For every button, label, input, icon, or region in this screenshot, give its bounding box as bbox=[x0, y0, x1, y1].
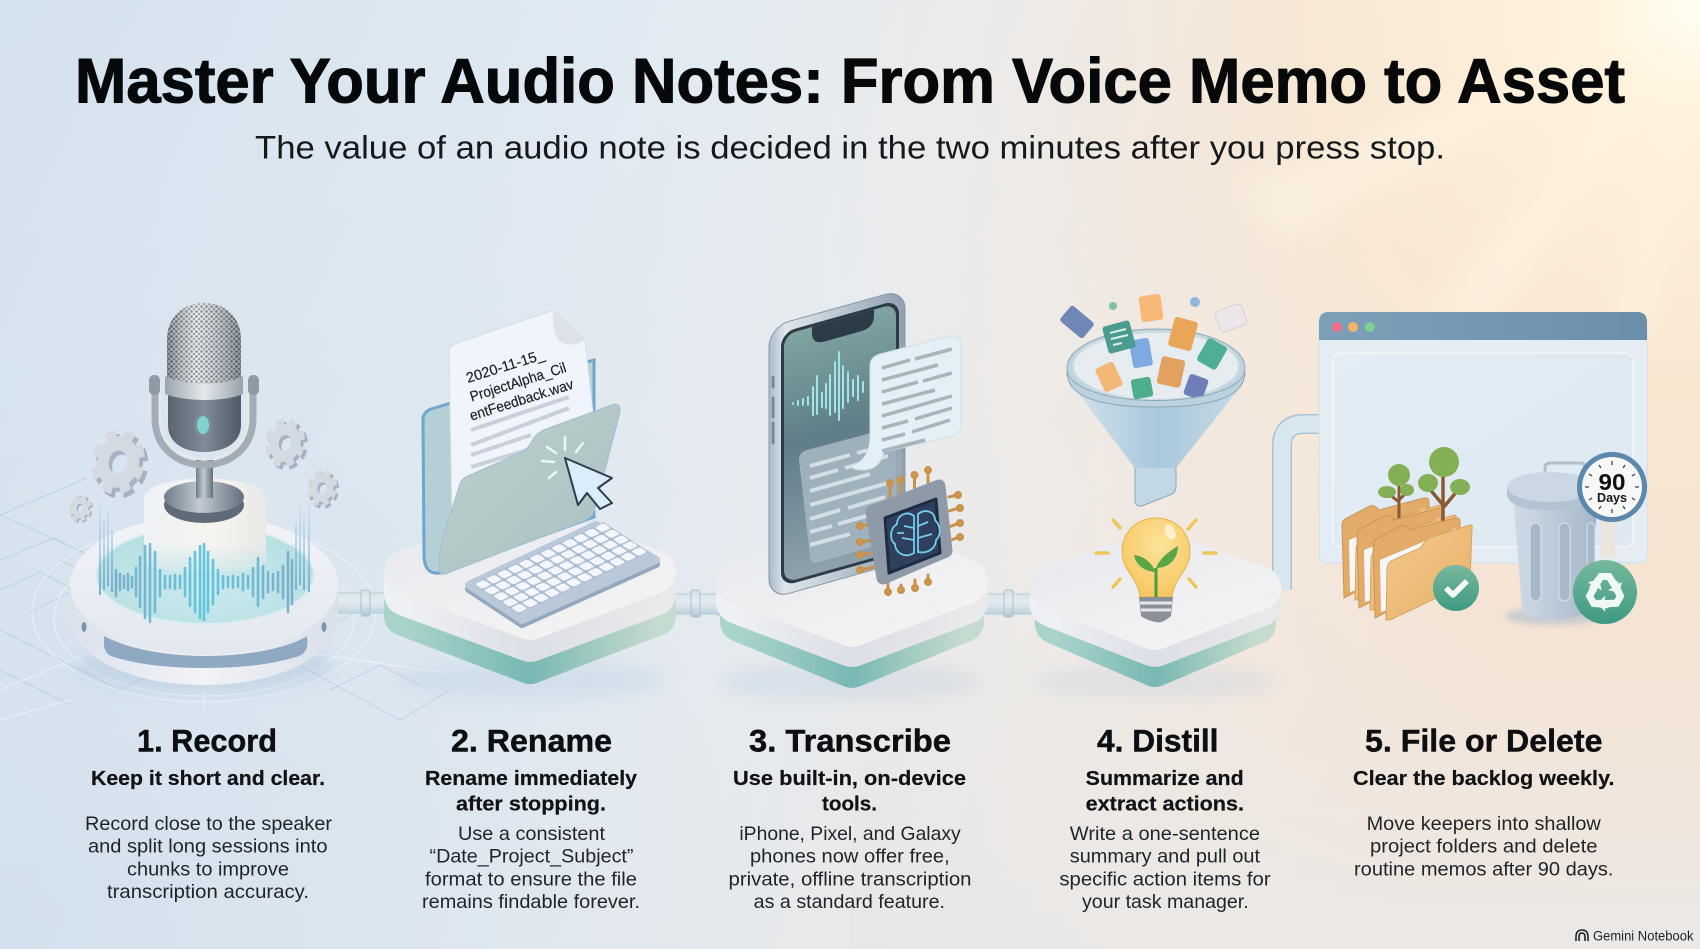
icon: funnel bbox=[1067, 329, 1245, 506]
text block: step 4: 4. Distill bbox=[1097, 723, 1218, 759]
text block: step 3: as a standard feature. bbox=[754, 891, 945, 913]
title: Master Your Audio Notes: From Voice Memo to Asset bbox=[75, 47, 1625, 117]
icon: AI chip with brain bbox=[858, 468, 962, 594]
panel: step 4 distill illustration bbox=[1035, 294, 1275, 698]
icon: transcript card bbox=[799, 428, 902, 563]
text block: step 2: format to ensure the file bbox=[425, 868, 637, 890]
text block: step 1: transcription accuracy. bbox=[107, 881, 309, 903]
panel: step 3 transcribe illustration bbox=[722, 289, 982, 700]
text block: step 2: “Date_Project_Subject” bbox=[430, 846, 634, 868]
icon: check badge bbox=[1433, 565, 1479, 611]
text block: step 4: Summarize and bbox=[1086, 767, 1244, 790]
text block: step 5: Clear the backlog weekly. bbox=[1353, 767, 1614, 790]
icon: browser window bbox=[1319, 312, 1647, 563]
platform 3 bbox=[722, 530, 982, 700]
text block: step 1: chunks to improve bbox=[127, 858, 289, 880]
icon: 90 days timer: Days bbox=[1597, 490, 1627, 505]
icon: 90 days timer: 90 bbox=[1598, 469, 1626, 495]
text block: step 3: Use built-in, on-device bbox=[733, 767, 966, 790]
icon: document with file name: ProjectAlpha_Cil bbox=[468, 360, 568, 406]
text block: step 1: Record close to the speaker bbox=[85, 813, 333, 835]
icon: pedestal bbox=[144, 478, 266, 572]
icon: light bulb with sprout bbox=[1096, 518, 1216, 622]
text block: step 1: and split long sessions into bbox=[88, 836, 328, 858]
text block: step 3 bbox=[728, 723, 972, 913]
text block: step 5: 5. File or Delete bbox=[1365, 723, 1602, 759]
icon: folder back bbox=[423, 360, 594, 573]
text block: step 5: project folders and delete bbox=[1370, 836, 1598, 858]
icon: folders with trees bbox=[1342, 447, 1472, 620]
icon: small tree bbox=[1378, 464, 1414, 520]
subtitle: The value of an audio note is decided in the two minutes after you press stop. bbox=[255, 129, 1445, 165]
text block: step 5: Move keepers into shallow bbox=[1367, 813, 1602, 835]
text block: step 1: 1. Record bbox=[137, 723, 277, 759]
icon: trash bin bbox=[1505, 463, 1615, 625]
panel: step 2 rename illustration bbox=[395, 310, 665, 698]
platform 4 bbox=[1035, 552, 1275, 698]
text block: step 3: tools. bbox=[822, 792, 877, 816]
icon: floating cards bbox=[1059, 294, 1248, 407]
watermark: Gemini Notebook: Gemini Notebook bbox=[1593, 929, 1694, 944]
icon: folder front bbox=[439, 404, 620, 574]
connector pipes bbox=[326, 424, 1322, 618]
icon: document with file name bbox=[449, 310, 600, 520]
text block: step 4: extract actions. bbox=[1086, 792, 1244, 816]
text block: step 3: iPhone, Pixel, and Galaxy bbox=[739, 823, 961, 845]
text block: step 3: private, offline transcription bbox=[728, 868, 972, 890]
text block: step 4: Write a one-sentence bbox=[1070, 823, 1260, 845]
text block: step 2 bbox=[422, 723, 640, 913]
platform 2 bbox=[395, 527, 665, 698]
text block: step 1: Keep it short and clear. bbox=[91, 767, 325, 790]
icon: smartphone bbox=[769, 289, 961, 599]
icon: speech bubble bbox=[850, 336, 961, 470]
text block: step 5 bbox=[1353, 723, 1614, 880]
blueprint grid lines bbox=[0, 478, 450, 720]
text block: step 4: your task manager. bbox=[1082, 891, 1249, 913]
text block: step 3: 3. Transcribe bbox=[749, 723, 951, 759]
icon: cursor bbox=[542, 437, 612, 509]
icon: microphone bbox=[149, 303, 259, 523]
text block: step 2: Rename immediately bbox=[425, 767, 638, 790]
text block: step 5: routine memos after 90 days. bbox=[1354, 858, 1614, 880]
text block: step 4 bbox=[1059, 723, 1271, 913]
text block: step 2: remains findable forever. bbox=[422, 891, 640, 913]
icon: keyboard bbox=[469, 522, 656, 624]
icon: 90 days timer bbox=[1577, 452, 1647, 522]
icon: document with file name: 2020-11-15_ bbox=[464, 347, 547, 387]
text block: step 1 bbox=[85, 723, 333, 903]
text block: step 2: after stopping. bbox=[456, 792, 606, 816]
icon: base disc bbox=[70, 515, 338, 693]
text block: step 2: 2. Rename bbox=[451, 723, 612, 759]
panel: step 5 file or delete illustration bbox=[1319, 312, 1647, 625]
text block: step 2: Use a consistent bbox=[458, 823, 606, 845]
icon: gears bbox=[68, 419, 340, 522]
chart: audio waveform bbox=[100, 498, 309, 622]
icon: large tree bbox=[1418, 447, 1470, 525]
chart: phone waveform bbox=[793, 352, 863, 420]
panel: step 1 record illustration bbox=[68, 303, 340, 693]
text block: step 4: specific action items for bbox=[1059, 868, 1271, 890]
text block: step 4: summary and pull out bbox=[1070, 846, 1261, 868]
text block: step 3: phones now offer free, bbox=[750, 846, 950, 868]
icon: document with file name: entFeedback.wav bbox=[468, 377, 576, 425]
icon: recycle badge bbox=[1573, 560, 1637, 624]
